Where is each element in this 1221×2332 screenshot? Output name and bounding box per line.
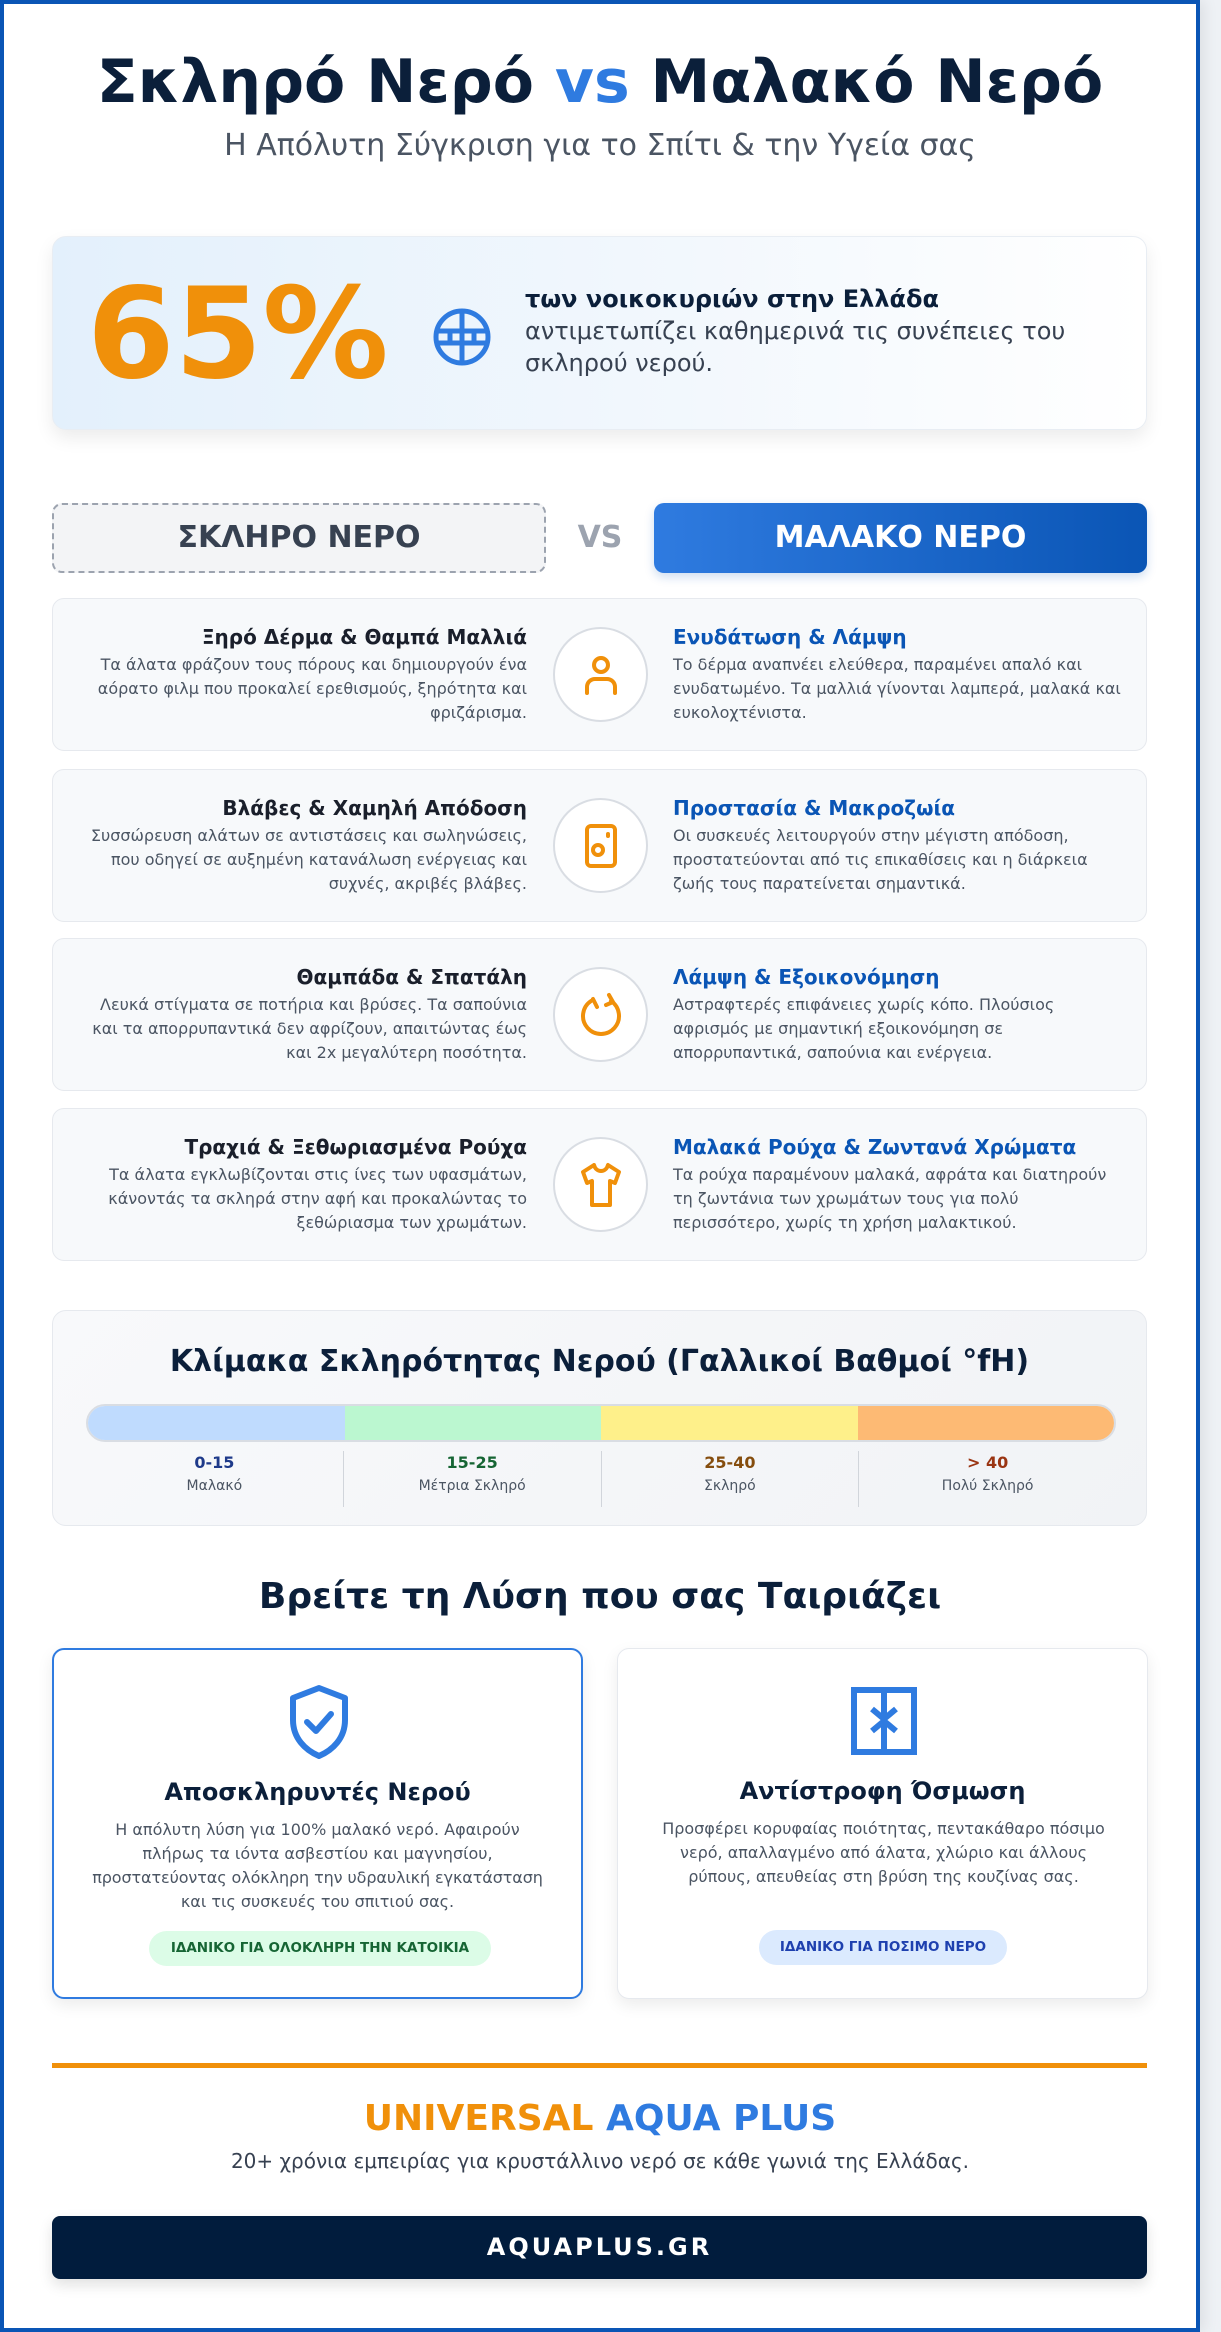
text: hard skin: Ξηρό Δέρμα & Θαμπά Μαλλιά [202, 625, 527, 649]
panel: row clothes [52, 1108, 1147, 1261]
icon: t-shirt [553, 1137, 648, 1232]
vs label: VS [578, 520, 622, 555]
icon: filter [851, 1687, 917, 1755]
text: soft skin [672, 625, 1121, 722]
card text [92, 1820, 543, 1911]
panel: statistic [52, 236, 1147, 430]
scale labels: Σκληρό [704, 1478, 756, 1494]
scale labels: 0-15 [194, 1453, 234, 1472]
text: hard clothes: Τραχιά & Ξεθωριασμένα Ρούχα [184, 1135, 527, 1159]
scale labels: 25-40 [704, 1453, 755, 1472]
brand name: UNIVERSAL AQUA PLUS [364, 2098, 836, 2139]
icon: refresh [553, 967, 648, 1062]
scale labels: > 40 [967, 1453, 1008, 1472]
card: reverse osmosis [617, 1648, 1148, 1999]
card title: Αντίστροφη Όσμωση [740, 1777, 1025, 1805]
text: soft clothes [672, 1135, 1106, 1232]
header: soft water [654, 503, 1147, 573]
text: hard clothes [108, 1135, 527, 1232]
panel: row appliances [52, 769, 1147, 922]
subtitle: Η Απόλυτη Σύγκριση για το Σπίτι & την Υγεία σας [224, 128, 976, 163]
header: hard water: ΣΚΛΗΡΟ ΝΕΡΟ [177, 520, 421, 555]
text: hard cleaning: Θαμπάδα & Σπατάλη [296, 965, 527, 989]
text: soft appliances [673, 796, 1088, 893]
big number: 65% [87, 260, 389, 407]
text: hard cleaning: Λευκά στίγματα σε ποτήρια και βρύσες. Τα σαπούνια και τα απορρυπαντικά δεν αφρίζουν, απαιτώντας έως και 2x μεγαλύτερη ποσότητα. [92, 995, 527, 1062]
icon: globe [434, 308, 490, 366]
header: hard water [52, 503, 546, 573]
text: soft cleaning: Αστραφτερές επιφάνειες χωρίς κόπο. Πλούσιος αφρισμός με σημαντική εξοικονόμηση σε απορρυπαντικά, σαπούνια και ενέργεια. [673, 995, 1054, 1062]
footer bar: AQUAPLUS.GR [487, 2233, 712, 2261]
tagline: 20+ χρόνια εμπειρίας για κρυστάλλινο νερό σε κάθε γωνιά της Ελλάδας. [231, 2149, 969, 2173]
text: soft skin: Ενυδάτωση & Λάμψη [673, 625, 907, 649]
icon: person [553, 627, 648, 722]
header: soft water: ΜΑΛΑΚΟ ΝΕΡΟ [775, 520, 1026, 555]
card title: Αποσκληρυντές Νερού [164, 1778, 471, 1806]
pill [759, 1930, 1007, 1965]
card text: πλήρως τα ιόντα ασβεστίου και μαγνησίου, [142, 1844, 493, 1863]
icon: appliance [553, 798, 648, 893]
scale labels: Μέτρια Σκληρό [419, 1478, 526, 1494]
text: soft cleaning: Λάμψη & Εξοικονόμηση [673, 965, 940, 989]
panel: row skin [52, 598, 1147, 751]
scale labels [187, 1451, 1033, 1507]
text: hard appliances [91, 796, 527, 893]
scale title: Κλίμακα Σκληρότητας Νερού (Γαλλικοί Βαθμοί °fH) [170, 1344, 1029, 1379]
card text: Η απόλυτη λύση για 100% μαλακό νερό. Αφαιρούν [115, 1820, 520, 1839]
stat text [525, 285, 1065, 377]
scale bar [86, 1404, 1116, 1442]
text: hard clothes: Τα άλατα εγκλωβίζονται στις ίνες των υφασμάτων, κάνοντάς τα σκληρά στην αφή και προκαλώντας το ξεθώριασμα των χρωμάτων. [108, 1165, 527, 1232]
panel: row cleaning [52, 938, 1147, 1091]
text: soft skin: Το δέρμα αναπνέει ελεύθερα, παραμένει απαλό και ενυδατωμένο. Τα μαλλιά γίνονται λαμπερά, μαλακά και ευκολοχτένιστα. [673, 655, 1121, 722]
pill: ΙΔΑΝΙΚΟ ΓΙΑ ΠΟΣΙΜΟ ΝΕΡΟ [780, 1939, 986, 1955]
text: soft appliances: Οι συσκευές λειτουργούν στην μέγιστη απόδοση, προστατεύονται από τις επικαθίσεις και η διάρκεια ζωής τους παρατείνεται σημαντικά. [673, 826, 1088, 893]
text: soft appliances: Προστασία & Μακροζωία [673, 796, 955, 820]
card: water softeners [52, 1648, 583, 1999]
card text: και τις συσκευές του σπιτιού σας. [181, 1892, 454, 1911]
footer bar [52, 2216, 1147, 2279]
text: soft clothes: Μαλακά Ρούχα & Ζωντανά Χρώματα [673, 1135, 1076, 1159]
text: soft clothes: Τα ρούχα παραμένουν μαλακά, αφράτα και διατηρούν τη ζωντάνια των χρωμάτων τους για πολύ περισσότερο, χωρίς τη χρήση μαλακτικού. [673, 1165, 1106, 1232]
pill [149, 1931, 491, 1966]
heading: solutions: Βρείτε τη Λύση που σας Ταιριάζει [259, 1576, 941, 1617]
scale labels: Πολύ Σκληρό [942, 1478, 1033, 1494]
scale labels: 15-25 [447, 1453, 498, 1472]
panel: hardness scale [52, 1310, 1147, 1526]
scale labels: Μαλακό [187, 1478, 242, 1494]
text: soft cleaning [673, 965, 1054, 1062]
text: hard skin: Τα άλατα φράζουν τους πόρους και δημιουργούν ένα αόρατο φιλμ που προκαλεί ερεθισμούς, ξηρότητα και φριζάρισμα. [98, 655, 527, 722]
card text: προστατεύοντας ολόκληρη την υδραυλική εγκατάσταση [92, 1868, 543, 1887]
text: hard appliances: Συσσώρευση αλάτων σε αντιστάσεις και σωληνώσεις, που οδηγεί σε αυξημένη κατανάλωση ενέργειας και συχνές, ακριβές βλάβες. [91, 826, 527, 893]
stat text: των νοικοκυριών στην Ελλάδα [525, 285, 939, 313]
text: hard cleaning [92, 965, 527, 1062]
text: hard skin [98, 625, 527, 722]
card text: Προσφέρει κορυφαίας ποιότητας, πεντακάθαρο πόσιμο νερό, απαλλαγμένο από άλατα, χλώριο και άλλους ρύπους, απευθείας στη βρύση της κουζίνας σας. [662, 1819, 1105, 1886]
title: Σκληρό Νερό vs Μαλακό Νερό [97, 47, 1103, 117]
icon: shield [290, 1685, 348, 1759]
pill: ΙΔΑΝΙΚΟ ΓΙΑ ΟΛΟΚΛΗΡΗ ΤΗΝ ΚΑΤΟΙΚΙΑ [171, 1940, 469, 1956]
stat text: αντιμετωπίζει καθημερινά τις συνέπειες του σκληρού νερού. [525, 317, 1065, 377]
text: hard appliances: Βλάβες & Χαμηλή Απόδοση [222, 796, 527, 820]
